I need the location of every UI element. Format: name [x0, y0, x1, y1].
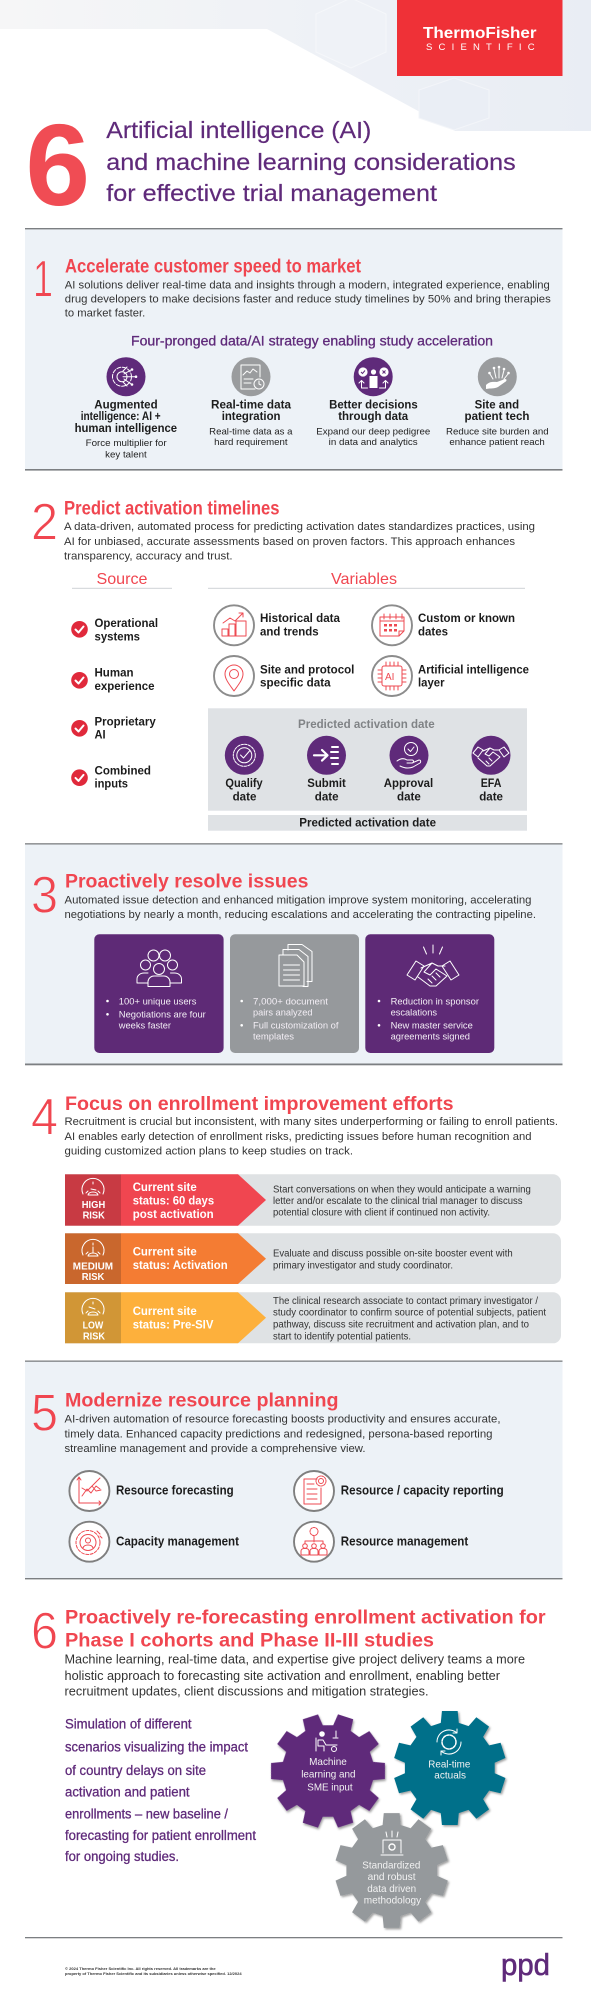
row: low risk: status: Pre-SIV — [133, 1317, 213, 1331]
variable: custom or known dates: dates — [418, 625, 448, 639]
check: proprietary AI: AI — [94, 728, 106, 742]
panel: 1 accelerate customer speed to market — [25, 228, 562, 471]
section number 4: 4 — [31, 1088, 58, 1146]
variable: artificial intelligence layer: layer — [418, 676, 445, 690]
body text: timely data. Enhanced capacity predictions and redesigned, persona-based reporting — [64, 1428, 492, 1440]
item: resource forecasting: Resource forecasting — [116, 1484, 234, 1498]
purple callout text: activation and patient — [65, 1785, 190, 1800]
icon: gauge — [82, 1298, 104, 1315]
copyright — [65, 1966, 242, 1976]
variables header: Variables — [331, 571, 397, 588]
subheading: Four-pronged data/AI strategy enabling study acceleration — [131, 334, 493, 349]
gear: real-time actuals: actuals — [434, 1770, 466, 1781]
body text: AI-driven automation of resource forecasting boosts productivity and ensures accurate, — [64, 1414, 500, 1426]
icon: handshake — [407, 945, 459, 986]
card: agreements — [365, 934, 494, 1053]
icon: submit date: date — [315, 789, 339, 803]
check: operational systems: systems — [94, 629, 140, 643]
strategy labels: Real-time data — [211, 399, 292, 411]
heading: Focus on enrollment improvement efforts — [65, 1094, 453, 1115]
risk label: LOW — [83, 1321, 104, 1332]
check: combined inputs: inputs — [94, 777, 128, 791]
title text — [106, 117, 516, 206]
variable: historical data and trends: Historical data — [260, 611, 340, 625]
item: resource / capacity reporting — [294, 1471, 504, 1511]
purple callout text: scenarios visualizing the impact — [65, 1740, 248, 1755]
panel: 5 modernize resource planning — [25, 1360, 562, 1579]
bullets: weeks faster — [118, 1020, 172, 1031]
bullets: templates — [253, 1031, 294, 1042]
body text: negotiations by nearly a month, reducing escalations and accelerating the contracting pipeline. — [64, 909, 536, 921]
strategy labels: key talent — [105, 448, 147, 459]
strategy labels: integration — [222, 411, 280, 423]
card: users — [94, 934, 224, 1053]
check: proprietary AI: Proprietary — [94, 715, 156, 729]
item: capacity management: Capacity management — [116, 1535, 240, 1549]
copyright: property of Thermo Fisher Scientific and its subsidiaries unless otherwise specified. 12/2024 — [65, 1971, 242, 1976]
action text: Start conversations on when they would anticipate a warning — [273, 1184, 531, 1195]
purple callout text — [65, 1717, 256, 1864]
icon: real-time cycle — [437, 1729, 461, 1755]
predicted activation date bar: Predicted activation date — [299, 817, 436, 829]
strategy labels: enhance patient reach — [449, 436, 545, 447]
body text: streamline management and provide a comprehensive view. — [64, 1443, 366, 1455]
icon: better decisions — [354, 357, 393, 396]
strategy labels: in data and analytics — [329, 436, 418, 447]
variable: site and protocol specific data: specific data — [260, 676, 331, 690]
heading: Modernize resource planning — [65, 1391, 338, 1412]
row: high risk — [65, 1174, 561, 1226]
row: high risk: status: 60 days — [133, 1193, 214, 1207]
body text: AI for unbiased, accurate assessments based on proven factors. This approach enhances — [64, 536, 515, 548]
strategy labels: Better decisions — [329, 399, 418, 411]
logo: Thermo Fisher Scientific: SCIENTIFIC — [426, 42, 535, 53]
risk label: MEDIUM — [73, 1261, 113, 1272]
icon: submit date: Submit — [307, 776, 346, 790]
icon: augmented intelligence gear — [106, 357, 146, 396]
strategy labels: Site and — [475, 399, 519, 411]
check: combined inputs — [71, 763, 151, 791]
section number 1: 1 — [33, 251, 53, 309]
bullets: Full customization of — [253, 1021, 339, 1032]
item: capacity management — [69, 1522, 240, 1562]
body text: guiding customized action plans to keep studies on track. — [64, 1145, 353, 1157]
panel title: Predicted activation date — [298, 719, 435, 731]
icon: approval date — [384, 736, 433, 803]
row: low risk — [65, 1292, 561, 1343]
strategy labels: Reduce site burden and — [446, 426, 549, 437]
predicted activation date bar — [208, 815, 527, 831]
gear: machine learning and SME input: Machine — [309, 1757, 347, 1768]
gear: machine learning and SME input: learning and — [301, 1770, 356, 1781]
bullets: 7,000+ document — [253, 996, 328, 1007]
variable: custom or known dates: Custom or known — [418, 611, 515, 625]
check: human experience — [71, 666, 155, 693]
heading: Proactively re-forecasting enrollment activation for — [65, 1607, 546, 1628]
copyright: © 2024 Thermo Fisher Scientific Inc. All rights reserved. All trademarks are the — [65, 1966, 216, 1971]
bullets — [240, 996, 339, 1042]
title — [26, 100, 516, 230]
row: medium risk: RISK — [82, 1272, 105, 1283]
gear: standardized and robust data driven methodology: data driven — [367, 1884, 416, 1895]
variable: site and protocol specific data — [214, 656, 354, 696]
bullets: Negotiations are four — [119, 1010, 207, 1021]
icon: EFA date handshake — [472, 736, 510, 803]
bullets: New master service — [391, 1021, 473, 1032]
logo: Thermo Fisher Scientific — [397, 0, 562, 76]
row: high risk: potential closure with client if continued non activity. — [273, 1208, 490, 1219]
panel: 6 proactively re-forecasting enrollment activation — [31, 1602, 546, 1928]
body text: drug developers to make decisions faster and reduce study timelines by 50% and bring therapies — [65, 293, 551, 305]
item: resource forecasting — [69, 1471, 234, 1511]
bullets: Reduction in sponsor — [391, 996, 480, 1007]
icon: qualify date: date — [233, 789, 257, 803]
row: low risk: start to identify potential patients. — [273, 1331, 411, 1342]
variable: artificial intelligence layer: Artificial intelligence — [418, 662, 529, 676]
icon: gauge — [82, 1239, 104, 1256]
icon: person at desk — [316, 1731, 338, 1752]
body text: Machine learning, real-time data, and expertise give project delivery teams a more — [64, 1652, 525, 1666]
source header: Source — [96, 571, 148, 588]
heading — [65, 1607, 546, 1652]
row: medium risk: primary investigator and study coordinator. — [273, 1260, 453, 1271]
icon: EFA date handshake: EFA — [481, 776, 502, 790]
item: resource / capacity reporting: Resource / capacity reporting — [341, 1484, 504, 1498]
variable: site and protocol specific data: Site and protocol — [260, 662, 354, 676]
body text: AI solutions deliver real-time data and insights through a modern, integrated experience, enabling — [65, 279, 550, 291]
status: Current site — [133, 1180, 197, 1194]
icon: submit date — [307, 736, 346, 803]
check: human experience: Human — [94, 666, 134, 680]
icon: EFA date handshake: date — [479, 789, 503, 803]
action text: Evaluate and discuss possible on-site booster event with — [273, 1249, 513, 1260]
purple callout text: forecasting for patient enrollment — [65, 1828, 256, 1843]
footer — [25, 1937, 562, 1982]
gear: machine learning and SME input: SME input — [307, 1782, 353, 1793]
bullets: escalations — [391, 1007, 437, 1018]
strategy labels: Expand our deep pedigree — [316, 426, 430, 437]
heading: Proactively resolve issues — [65, 872, 308, 893]
icon: site and patient tech hand — [478, 357, 517, 396]
item: resource management: Resource management — [341, 1535, 469, 1549]
strategy labels: Real-time data as a — [209, 426, 293, 437]
row: low risk: study coordinator to confirm source of potential subjects, patient — [273, 1308, 546, 1319]
status: Current site — [133, 1304, 197, 1318]
gear: standardized and robust data driven methodology: methodology — [364, 1895, 422, 1906]
gear: standardized and robust data driven methodology: and robust — [368, 1872, 416, 1883]
strategy labels: patient tech — [464, 411, 530, 423]
purple callout text: for ongoing studies. — [65, 1849, 179, 1864]
gear: real-time actuals: Real-time — [428, 1759, 471, 1770]
body text — [64, 1116, 558, 1157]
variable: artificial intelligence layer — [372, 656, 529, 696]
body text — [64, 1414, 500, 1455]
predicted activation date panel — [208, 708, 527, 811]
body text — [64, 895, 536, 921]
bullets: pairs analyzed — [253, 1007, 312, 1018]
gear: machine learning and SME input — [257, 1699, 399, 1843]
heading: Phase I cohorts and Phase II-III studies — [65, 1631, 434, 1652]
section number 2: 2 — [31, 493, 58, 551]
body text: transparency, accuracy and trust. — [64, 550, 233, 562]
icon: real-time data document — [232, 357, 270, 396]
title text: and machine learning considerations — [106, 149, 516, 175]
row: low risk: RISK — [83, 1331, 106, 1342]
strategy labels: intelligence: AI + — [81, 411, 161, 423]
section number 5: 5 — [31, 1385, 58, 1443]
strategy labels: Augmented — [94, 399, 158, 411]
body text — [64, 521, 535, 562]
body text: A data-driven, automated process for predicting activation dates standardizes practices, using — [64, 521, 535, 533]
body text: recruitment updates, client discussions and mitigation strategies. — [64, 1685, 428, 1699]
heading: Accelerate customer speed to market — [65, 256, 362, 278]
action text: The clinical research associate to contact primary investigator / — [273, 1296, 538, 1307]
icon: approval date: date — [397, 789, 421, 803]
strategy labels: Force multiplier for — [86, 437, 167, 448]
icon: approval date: Approval — [384, 776, 433, 790]
logo: ppd: ppd — [501, 1947, 550, 1982]
title text: Artificial intelligence (AI) — [106, 117, 371, 143]
icon: documents — [279, 944, 312, 986]
body text — [65, 279, 551, 319]
check: human experience: experience — [94, 679, 155, 693]
strategy labels: hard requirement — [214, 436, 288, 447]
header background band — [0, 0, 591, 131]
row: high risk: post activation — [133, 1207, 214, 1221]
source list — [71, 616, 158, 791]
gear: real-time actuals — [394, 1711, 505, 1825]
purple callout text: enrollments – new baseline / — [65, 1806, 228, 1821]
variable: historical data and trends — [214, 605, 340, 645]
bullets — [106, 996, 207, 1031]
strategy labels — [75, 399, 549, 459]
check: operational systems: Operational — [94, 616, 158, 630]
check: operational systems — [71, 616, 158, 643]
check: proprietary AI — [71, 715, 156, 742]
big number 6: 6 — [26, 100, 90, 230]
check: combined inputs: Combined — [94, 763, 151, 777]
section number 3: 3 — [31, 867, 58, 925]
bullets: agreements signed — [391, 1031, 470, 1042]
icon: gauge — [82, 1178, 104, 1195]
strategy labels: human intelligence — [75, 423, 177, 435]
icon: qualify date — [225, 736, 264, 803]
purple callout text: of country delays on site — [65, 1763, 206, 1778]
row: high risk: letter and/or escalate to the clinical trial manager to discuss — [273, 1196, 523, 1207]
body text: Automated issue detection and enhanced mitigation improve system monitoring, accelerating — [64, 895, 532, 907]
status: Current site — [133, 1245, 197, 1259]
gear: standardized and robust data driven methodology: Standardized — [362, 1860, 421, 1871]
variable: historical data and trends: and trends — [260, 625, 319, 639]
title text: for effective trial management — [106, 180, 438, 206]
heading: Predict activation timelines — [64, 498, 280, 519]
risk label: HIGH — [82, 1200, 105, 1211]
body text: to market faster. — [65, 307, 145, 319]
bullets — [378, 996, 480, 1042]
panel: 3 proactively resolve issues — [25, 843, 562, 1065]
icon: laptop with gear — [381, 1831, 403, 1855]
row: medium risk — [65, 1233, 561, 1284]
panel: 4 focus on enrollment improvement efforts — [31, 1088, 561, 1343]
section number 6: 6 — [31, 1602, 58, 1660]
bullets: 100+ unique users — [119, 996, 197, 1007]
icon: qualify date: Qualify — [225, 776, 263, 790]
body text — [64, 1652, 525, 1699]
variable: custom or known dates — [372, 605, 515, 645]
logo: Thermo Fisher Scientific: ThermoFisher — [423, 25, 536, 42]
item: resource management — [294, 1522, 469, 1562]
card: documents — [230, 934, 359, 1053]
gear: standardized and robust data driven methodology — [336, 1813, 448, 1928]
variable: artificial intelligence layer: AI — [385, 672, 394, 683]
purple callout text: Simulation of different — [65, 1717, 192, 1732]
panel: 2 predict activation timelines — [31, 493, 535, 831]
row: high risk: RISK — [83, 1210, 106, 1221]
source header — [72, 571, 172, 589]
body text: holistic approach to forecasting site activation and enrollment, enabling better — [64, 1669, 500, 1683]
strategy labels: through data — [338, 411, 409, 423]
row: low risk: pathway, discuss site recruitment and activation plan, and to — [273, 1320, 530, 1331]
row: medium risk: status: Activation — [133, 1258, 228, 1272]
icon: people — [137, 950, 182, 986]
body text: AI enables early detection of enrollment risks, predicting issues before human recognition and — [64, 1131, 532, 1143]
body text: Recruitment is crucial but inconsistent, with many sites underperforming or failing to enroll patients. — [64, 1116, 558, 1128]
